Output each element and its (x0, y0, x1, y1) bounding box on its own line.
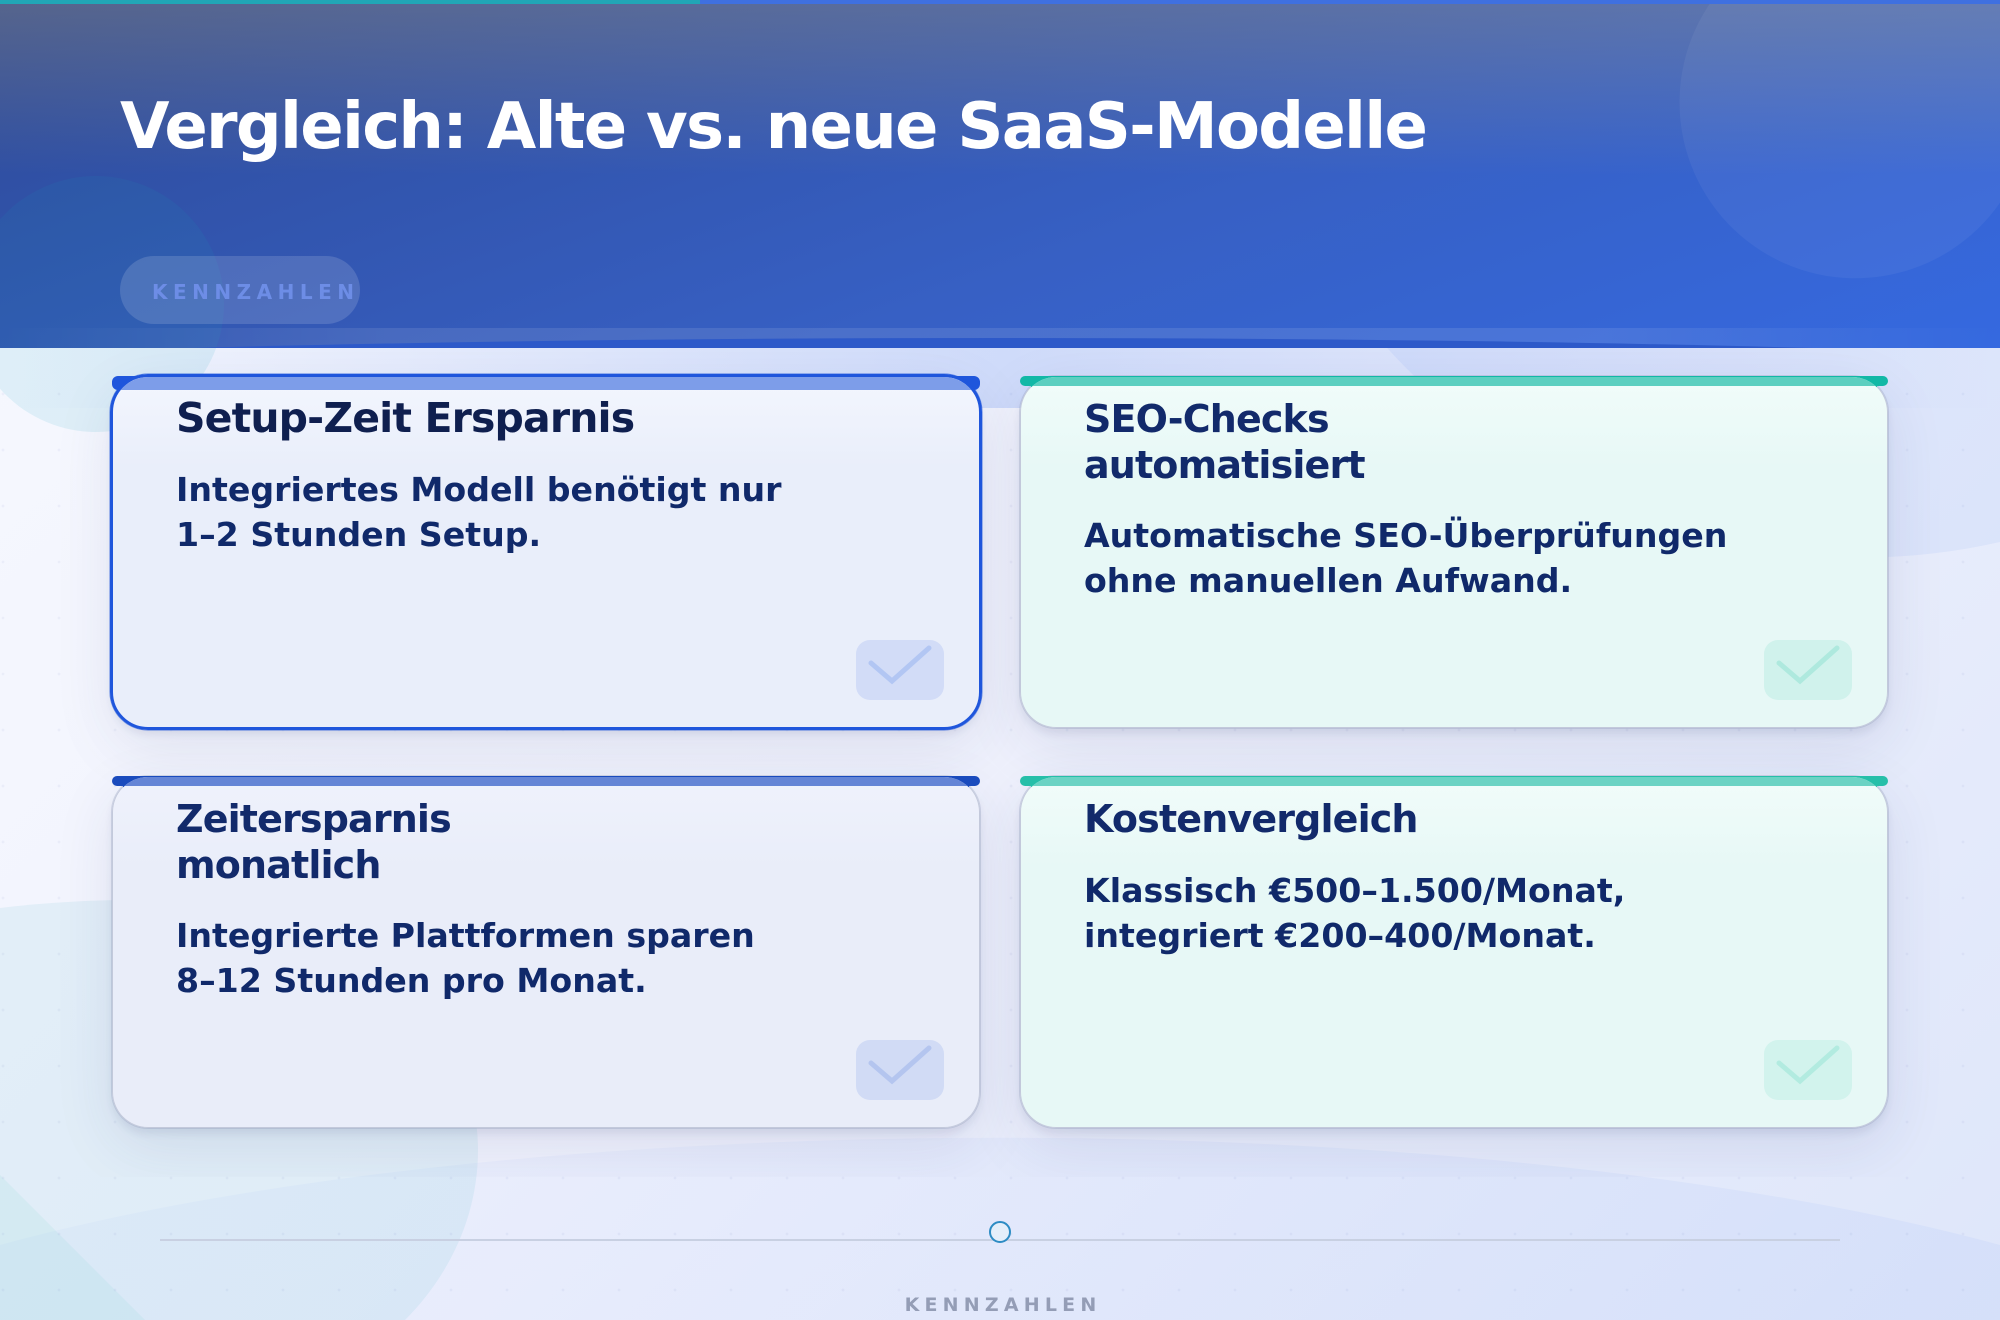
header decorative shapes (37, 64, 2000, 348)
card body (112, 776, 980, 1128)
top accent bar (112, 776, 980, 786)
icon: check (856, 1040, 944, 1100)
footer divider line (160, 1239, 1840, 1241)
card body (110, 374, 982, 730)
icon: check (1764, 640, 1852, 700)
card text: 8–12 Stunden pro Monat. (176, 961, 647, 1000)
top accent progress (0, 0, 700, 4)
card text: Integrierte Plattformen sparen (176, 916, 755, 955)
card text (176, 470, 782, 554)
card heading: SEO-Checks (1084, 397, 1329, 441)
card: Kostenvergleich (1020, 776, 1888, 1128)
dot pattern (0, 348, 2000, 1320)
top accent bar (1020, 376, 1888, 386)
card heading (176, 797, 451, 887)
footer label: KENNZAHLEN (905, 1294, 1101, 1316)
top gradient band (0, 348, 2000, 408)
card heading: automatisiert (1084, 443, 1365, 487)
panel: header (0, 0, 2000, 348)
footer circle marker (989, 1221, 1011, 1243)
title: Vergleich: Alte vs. neue SaaS-Modelle (120, 90, 1426, 164)
icon: check (1764, 1040, 1852, 1100)
top accent bar (1020, 776, 1888, 786)
top accent bar (112, 376, 980, 390)
card text (176, 916, 755, 1000)
card heading (1084, 397, 1365, 487)
card: Zeitersparnis monatlich (112, 776, 980, 1128)
card text (1084, 871, 1625, 955)
badge: Kennzahlen (120, 256, 360, 324)
card text: Automatische SEO-Überprüfungen (1084, 516, 1727, 555)
card text: Integriertes Modell benötigt nur (176, 470, 782, 509)
card text: ohne manuellen Aufwand. (1084, 561, 1572, 600)
card heading: Zeitersparnis (176, 797, 451, 841)
card heading: Kostenvergleich (1084, 797, 1418, 841)
card text: integriert €200–400/Monat. (1084, 916, 1596, 955)
icon: check (856, 640, 944, 700)
badge: Kennzahlen: KENNZAHLEN (152, 280, 360, 304)
card text (1084, 516, 1727, 600)
card: SEO-Checks automatisiert (1020, 376, 1888, 728)
card heading: monatlich (176, 843, 381, 887)
top accent line (0, 0, 2000, 4)
card: Setup-Zeit Ersparnis (109, 373, 983, 731)
panel: main cards section (100, 348, 1900, 1155)
card text: Klassisch €500–1.500/Monat, (1084, 871, 1625, 910)
card heading: Setup-Zeit Ersparnis (176, 394, 634, 442)
card text: 1–2 Stunden Setup. (176, 515, 541, 554)
card body (1020, 376, 1888, 728)
card body (1020, 776, 1888, 1128)
